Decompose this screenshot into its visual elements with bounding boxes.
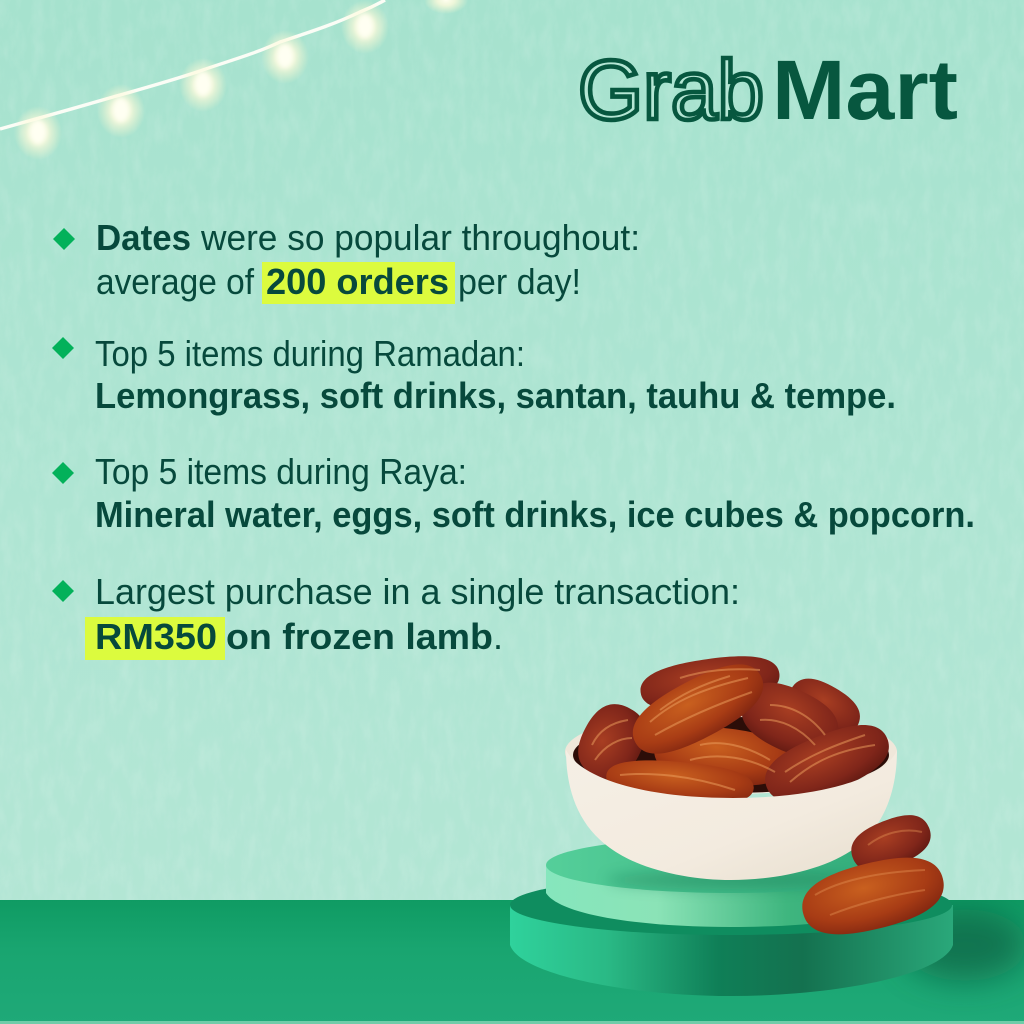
- GrabMart logo: [578, 43, 958, 137]
- text: Ramadan items: Top 5 items during Ramadan:: [95, 333, 525, 374]
- highlight: 200 orders: [262, 262, 455, 304]
- bowl of dates: [565, 649, 898, 880]
- bowl front: [566, 750, 897, 880]
- small pedestal: [546, 837, 916, 927]
- bullet: top items during Ramadan: [52, 333, 896, 416]
- text: largest purchase: on frozen lamb: [226, 616, 493, 657]
- text: dates popularity: per day!: [458, 261, 581, 302]
- text: Raya items: Mineral water, eggs, soft drinks, ice cubes & popcorn.: [95, 494, 975, 535]
- large pedestal: [510, 875, 953, 996]
- loose dates: [795, 806, 951, 945]
- bullet marker: [53, 228, 75, 250]
- text: Raya items: Top 5 items during Raya:: [95, 451, 467, 492]
- text: dates popularity: average of: [96, 261, 255, 302]
- string lights: [0, 0, 468, 160]
- text: largest purchase: [95, 571, 740, 657]
- bullet: largest purchase: [52, 571, 740, 660]
- text: dates popularity: 200 orders: [266, 261, 449, 302]
- text: dates popularity: were so popular throughout:: [200, 217, 640, 258]
- bullet marker: [52, 337, 74, 359]
- text: Ramadan items: [95, 333, 896, 416]
- bullet: top items during Raya: [52, 451, 975, 535]
- GrabMart logo: Mart: [772, 43, 958, 137]
- GrabMart logo: Grab: [578, 43, 764, 137]
- text: largest purchase: .: [493, 616, 503, 657]
- text: Ramadan items: Lemongrass, soft drinks, santan, tauhu & tempe.: [95, 375, 896, 416]
- text: dates popularity: [96, 217, 640, 302]
- green floor: [0, 900, 1024, 1024]
- highlight: RM350: [85, 617, 225, 660]
- bullet marker: [52, 580, 74, 602]
- text: Raya items: [95, 451, 975, 535]
- bullet marker: [52, 462, 74, 484]
- dates in bowl: [568, 649, 898, 813]
- text: dates popularity: Dates: [96, 217, 191, 258]
- bowl back: [565, 710, 897, 794]
- text: largest purchase: RM350: [95, 616, 217, 657]
- bullet: dates popularity: [53, 217, 640, 304]
- text: largest purchase: Largest purchase in a single transaction:: [95, 571, 740, 612]
